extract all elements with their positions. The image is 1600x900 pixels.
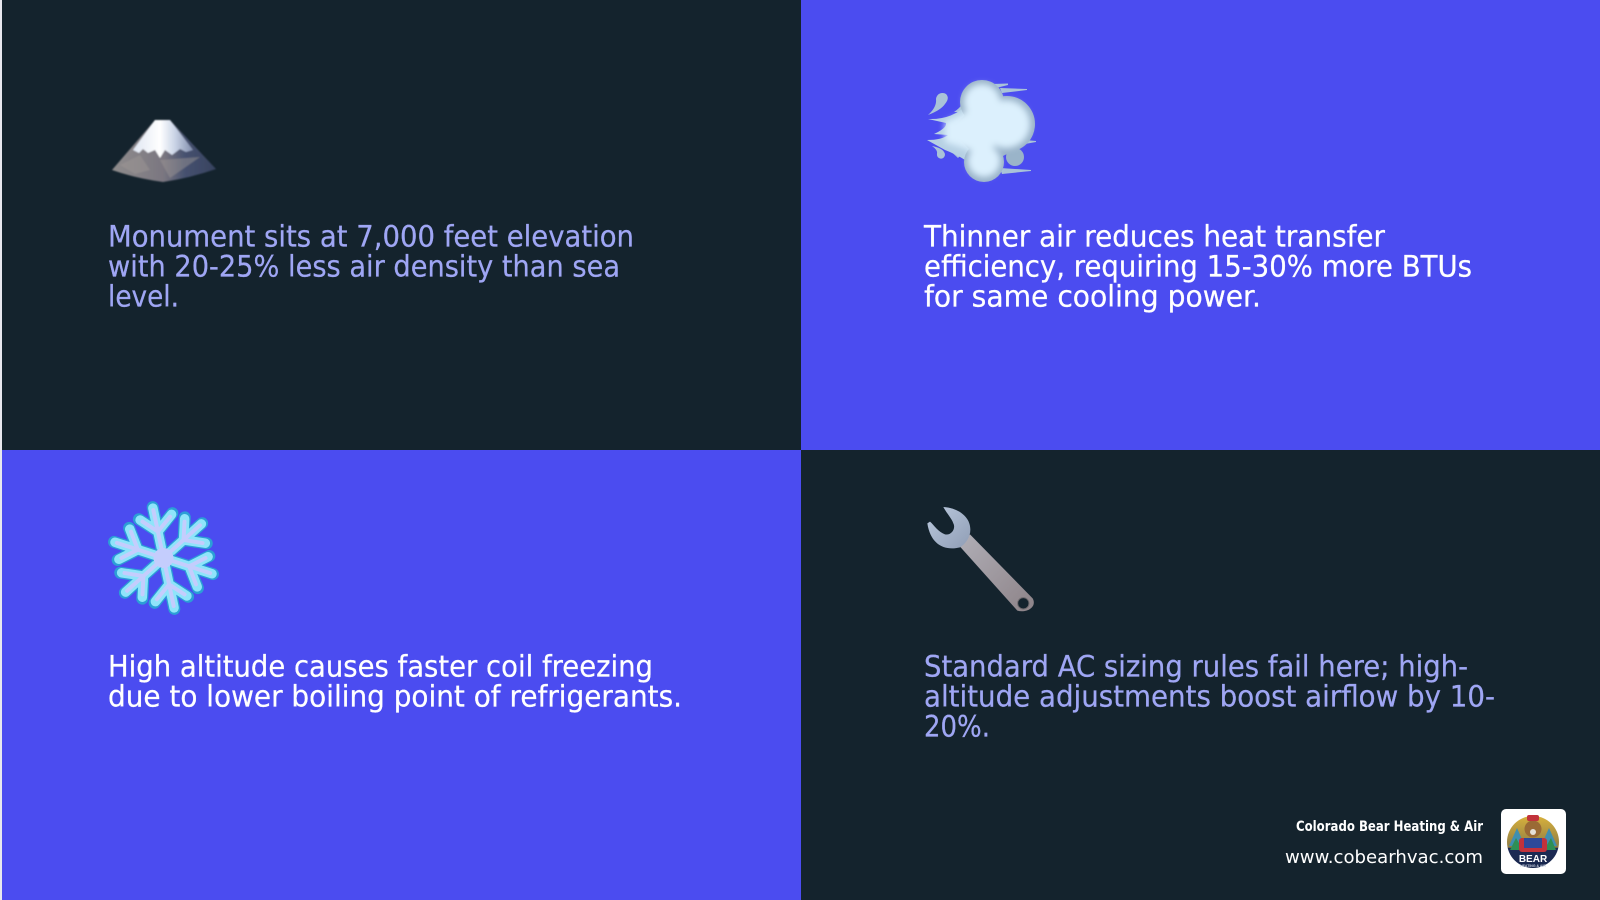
icon: wrench [927,507,1034,611]
icon: snow-capped mountain [112,120,216,182]
text: sizing fact: 20%. [924,710,990,744]
text: sizing fact: Standard AC sizing rules fail here; high- [924,650,1468,684]
panel: elevation [2,0,801,450]
text: company name: Colorado Bear Heating & Air [1296,819,1483,835]
text: coil freezing fact: due to lower boiling point of refrigerants. [108,680,682,714]
text: elevation fact: Monument sits at 7,000 feet elevation [108,220,634,254]
logo badge: BEAR [1519,854,1548,865]
logo badge [1501,809,1566,874]
text: sizing fact [924,650,1495,744]
text: website: www.cobearhvac.com [1285,847,1483,868]
text: heat transfer fact [923,220,1472,314]
icon: snowflake [100,496,227,620]
icon: wind cloud [927,80,1036,182]
text: elevation fact: level. [108,280,179,314]
text: coil freezing fact: High altitude causes faster coil freezing [108,650,653,684]
text: sizing fact: altitude adjustments boost airflow by 10- [924,680,1495,714]
panel: coil freezing [2,450,801,900]
text: heat transfer fact: Thinner air reduces heat transfer [923,220,1385,254]
text: coil freezing fact [108,650,682,714]
text: elevation fact [108,220,634,314]
text: heat transfer fact: efficiency, requiring 15-30% more BTUs [924,250,1472,284]
logo badge: HEATING & AIR [1520,864,1546,868]
panel: sizing [801,450,1600,900]
text: heat transfer fact: for same cooling power. [924,280,1261,314]
panel: heat transfer [801,0,1600,450]
text: elevation fact: with 20-25% less air density than sea [108,250,620,284]
